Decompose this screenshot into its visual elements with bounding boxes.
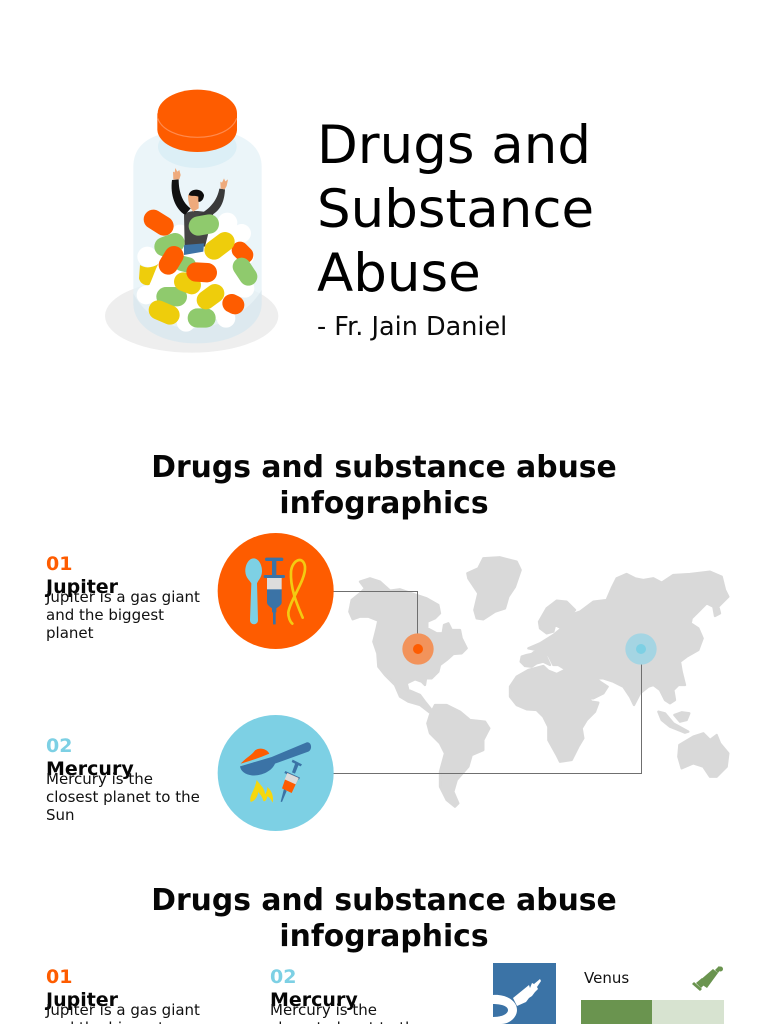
illustration: pill jar with person xyxy=(105,90,278,352)
progress bar: Venus xyxy=(581,1000,724,1024)
label: Venus: Venus xyxy=(584,969,629,987)
description: and the biggest xyxy=(46,606,164,624)
heading: section one: Drugs and substance abuse xyxy=(151,450,617,485)
icon: green syringe xyxy=(692,966,723,991)
tile: blue syringe icon xyxy=(493,963,556,1024)
heading: section one xyxy=(151,450,617,521)
description: Sun xyxy=(46,806,75,824)
title: Drugs and xyxy=(317,115,591,176)
name: Jupiter xyxy=(46,576,118,598)
heading: section two xyxy=(151,883,617,954)
number: 02 xyxy=(270,966,296,988)
heading: section two: infographics xyxy=(279,919,489,954)
description xyxy=(270,1001,424,1024)
item: Mercury map section xyxy=(46,735,200,824)
description xyxy=(45,588,200,642)
icon circle: spoon, flame, syringe xyxy=(218,715,334,831)
world map xyxy=(334,556,730,808)
title xyxy=(317,115,594,304)
item: Mercury lower section xyxy=(270,966,424,1024)
title: Abuse xyxy=(317,243,481,304)
description: planet xyxy=(46,624,94,642)
subtitle: - Fr. Jain Daniel xyxy=(317,312,507,342)
name: Jupiter xyxy=(46,989,118,1011)
heading: section one: infographics xyxy=(279,486,489,521)
name: Mercury xyxy=(270,989,358,1011)
lid xyxy=(157,113,237,152)
description: Mercury is the xyxy=(270,1001,377,1019)
pills xyxy=(153,219,248,318)
number: 01 xyxy=(46,966,72,988)
item: Jupiter map section xyxy=(44,553,200,642)
title: Substance xyxy=(317,179,594,240)
description xyxy=(46,770,200,824)
number: 01 xyxy=(46,553,72,575)
item: Jupiter lower section xyxy=(44,966,200,1024)
map marker: America xyxy=(402,633,434,665)
description: Jupiter is a gas giant xyxy=(46,1001,200,1019)
heading: section two: Drugs and substance abuse xyxy=(151,883,617,918)
name: Mercury xyxy=(46,758,134,780)
description: closest planet to the xyxy=(46,788,200,806)
progress bar fill xyxy=(581,1000,652,1024)
icon circle: spoon, syringe, cord xyxy=(218,533,334,649)
description: Mercury is the xyxy=(46,770,153,788)
map marker: Asia xyxy=(625,633,657,665)
person xyxy=(172,168,228,255)
description: Jupiter is a gas giant xyxy=(46,588,200,606)
number: 02 xyxy=(46,735,72,757)
